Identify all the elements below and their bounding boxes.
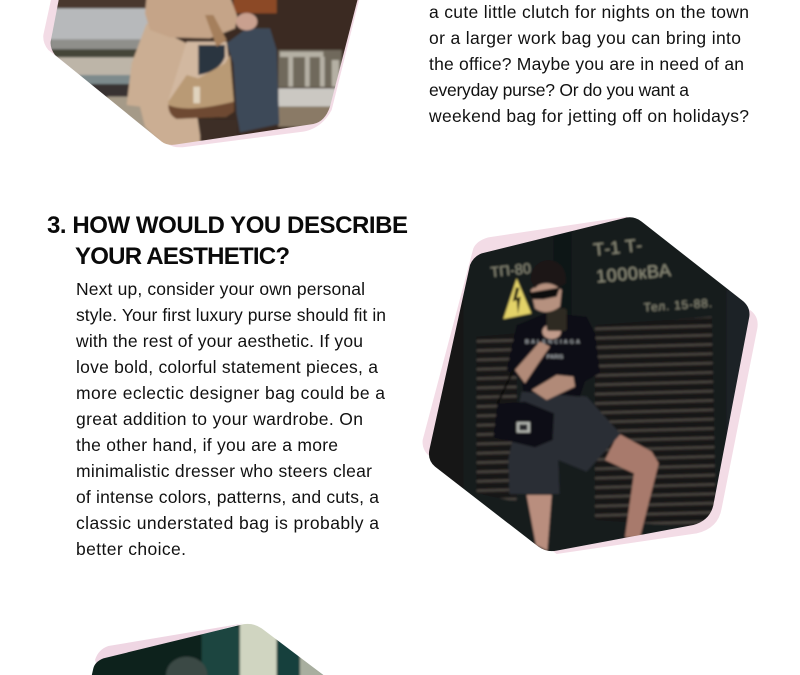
wall signage: Тел. 15-88. xyxy=(643,296,712,315)
text block: bag purpose paragraph: weekend bag for jetting off on holidays? xyxy=(428,106,749,126)
photo content: PARIS xyxy=(547,354,564,360)
pink backing shape xyxy=(423,217,758,554)
text block: aesthetic paragraph: the other hand, if you are a more xyxy=(76,435,338,455)
pink backing shape xyxy=(95,623,243,675)
text block: bag purpose paragraph: the office? Maybe you are in need of an xyxy=(429,54,744,74)
text block: bag purpose paragraph xyxy=(428,2,749,126)
text block: bag purpose paragraph: or a larger work bag you can bring into xyxy=(429,28,741,48)
heading: section 3: YOUR AESTHETIC? xyxy=(75,243,290,270)
text block: aesthetic paragraph: better choice. xyxy=(76,539,186,559)
text block: aesthetic paragraph: style. Your first luxury purse should fit in xyxy=(76,305,386,325)
pink backing shape xyxy=(43,0,360,147)
heading: section 3: 3. HOW WOULD YOU DESCRIBE xyxy=(47,212,408,239)
text block: aesthetic paragraph: of intense colors, patterns, and cuts, a xyxy=(76,487,379,507)
woman xyxy=(527,495,552,551)
text block: aesthetic paragraph: classic understated bag is probably a xyxy=(76,513,379,533)
text block: aesthetic paragraph: minimalistic dresser who steers clear xyxy=(76,461,372,481)
photo content xyxy=(92,624,324,675)
heading: section 3 xyxy=(47,212,408,270)
wall signage: Т-1 Т- xyxy=(592,235,643,260)
louvers xyxy=(595,317,716,528)
wall signage: ТП-80 xyxy=(490,261,532,281)
photo content: BALENCIAGA xyxy=(525,339,580,345)
text block: aesthetic paragraph: great addition to your wardrobe. On xyxy=(76,409,363,429)
text block: aesthetic paragraph: with the rest of your aesthetic. If you xyxy=(75,331,363,351)
text block: aesthetic paragraph xyxy=(75,279,386,559)
text block: bag purpose paragraph: a cute little clutch for nights on the town xyxy=(429,2,749,22)
black handbag xyxy=(493,402,554,447)
wall signage: 1000кВА xyxy=(595,260,672,287)
warning triangle xyxy=(503,278,531,319)
text block: aesthetic paragraph: Next up, consider your own personal xyxy=(76,279,365,299)
text block: bag purpose paragraph: everyday purse? Or do you want a xyxy=(429,80,689,100)
photo: next section image, cropped by the page edge xyxy=(92,624,324,675)
text block: aesthetic paragraph: more eclectic designer bag could be a xyxy=(76,383,385,403)
photo content xyxy=(428,217,750,552)
wall signage xyxy=(490,235,712,315)
photo content xyxy=(43,0,363,150)
photo: woman in trench coat with beige bag xyxy=(43,0,363,150)
photo: woman in black tee with black bag xyxy=(420,207,760,560)
text block: aesthetic paragraph: love bold, colorful statement pieces, a xyxy=(76,357,378,377)
